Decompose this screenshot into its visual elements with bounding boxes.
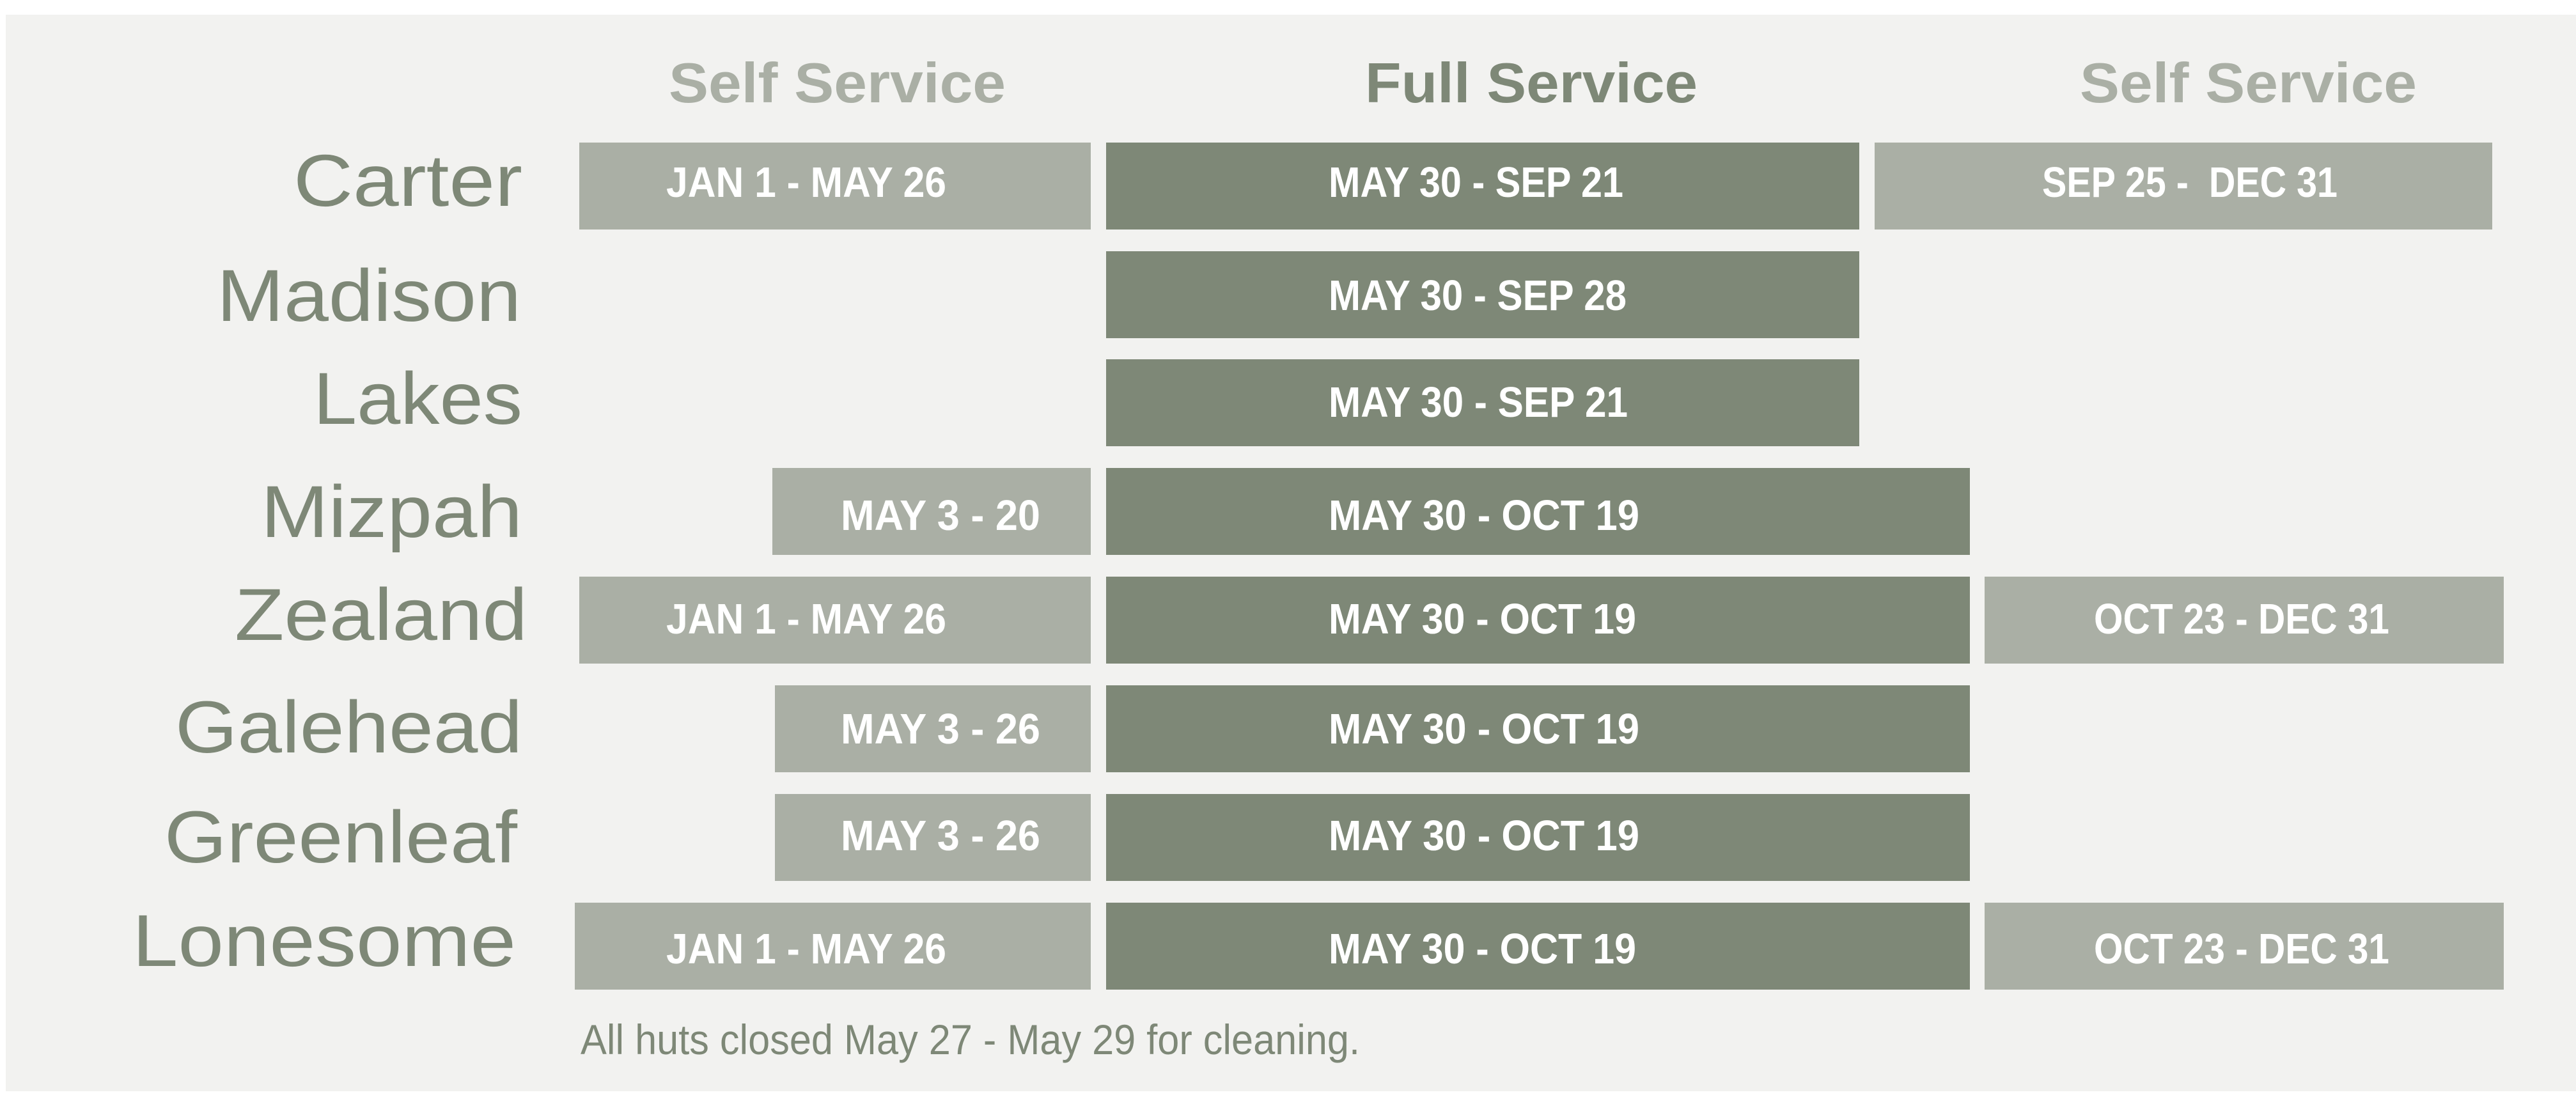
bar: self service late — [1985, 577, 2504, 664]
heading: full service: Full Service — [1365, 51, 1698, 114]
bar: self service early — [579, 577, 1091, 664]
bar: self service early — [772, 468, 1091, 555]
bar: full service: MAY 30 - OCT 19 — [1329, 705, 1639, 753]
bar: self service late: SEP 25 - DEC 31 — [2042, 159, 2338, 206]
bar: full service — [1106, 143, 1859, 230]
row: Carter — [293, 140, 2492, 230]
bar: self service early — [775, 685, 1091, 772]
bar: self service early — [575, 903, 1091, 990]
bar: self service early: MAY 3 - 20 — [841, 492, 1040, 540]
hut name: Zealand: Zealand — [235, 574, 527, 656]
bar: full service — [1106, 468, 1970, 555]
bar: full service — [1106, 685, 1970, 772]
bar: full service: MAY 30 - SEP 28 — [1329, 272, 1627, 320]
hut name: Mizpah: Mizpah — [261, 471, 522, 553]
heading: self service right: Self Service — [2080, 51, 2417, 114]
row: Galehead — [175, 685, 1970, 772]
bar: self service late — [1985, 903, 2504, 990]
hut name: Greenleaf: Greenleaf — [164, 797, 518, 878]
hut name: Galehead: Galehead — [175, 687, 522, 768]
bar: full service — [1106, 251, 1859, 338]
bar: full service: MAY 30 - OCT 19 — [1329, 595, 1636, 643]
bar: full service: MAY 30 - OCT 19 — [1329, 492, 1639, 540]
row: Mizpah — [261, 468, 1970, 555]
bar: full service: MAY 30 - SEP 21 — [1329, 159, 1623, 206]
bar: self service early: JAN 1 - MAY 26 — [666, 925, 946, 973]
hut name: Lakes: Lakes — [313, 358, 522, 440]
bar: full service: MAY 30 - OCT 19 — [1329, 812, 1639, 860]
hut name: Lonesome: Lonesome — [132, 900, 516, 982]
row: Greenleaf — [164, 794, 1970, 881]
bar: self service late: OCT 23 - DEC 31 — [2094, 595, 2389, 643]
hut name: Madison: Madison — [217, 255, 521, 337]
bar: self service early — [775, 794, 1091, 881]
hut name: Carter: Carter — [293, 140, 522, 222]
heading: self service left: Self Service — [669, 51, 1006, 114]
row: Zealand — [235, 574, 2504, 664]
bar: full service — [1106, 359, 1859, 446]
row: Madison — [217, 251, 1859, 338]
bar: full service — [1106, 577, 1970, 664]
bar: full service: MAY 30 - SEP 21 — [1329, 378, 1628, 426]
bar: self service early: MAY 3 - 26 — [841, 705, 1040, 753]
row: Lonesome — [132, 900, 2504, 990]
bar: self service early: JAN 1 - MAY 26 — [666, 159, 946, 206]
bar: self service early: MAY 3 - 26 — [841, 812, 1040, 860]
bar: self service late — [1875, 143, 2492, 230]
bar: self service early — [579, 143, 1091, 230]
bar: self service late: OCT 23 - DEC 31 — [2094, 925, 2389, 973]
bar: full service: MAY 30 - OCT 19 — [1329, 925, 1636, 973]
row: Lakes — [313, 358, 1859, 446]
bar: full service — [1106, 903, 1970, 990]
note: closure for cleaning: All huts closed May 27 - May 29 for cleaning. — [581, 1016, 1360, 1063]
bar: self service early: JAN 1 - MAY 26 — [666, 595, 946, 643]
bar: full service — [1106, 794, 1970, 881]
